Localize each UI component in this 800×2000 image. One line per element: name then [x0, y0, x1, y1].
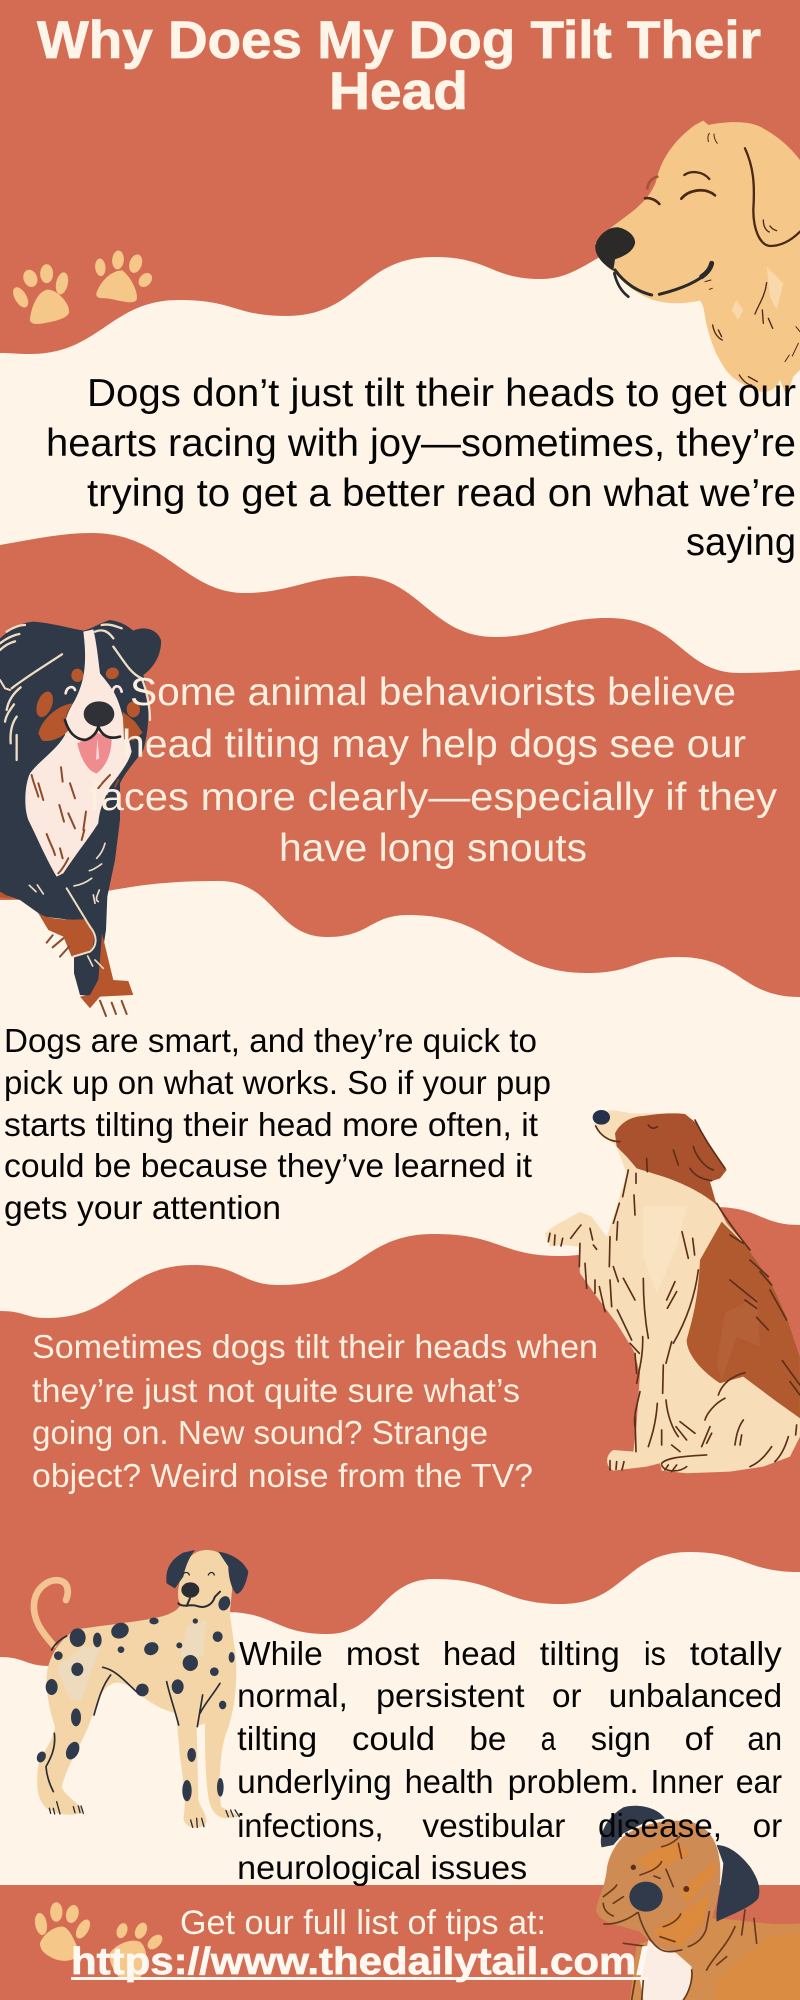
text block: health warning: of [685, 1720, 714, 1757]
cream wave band: middle [0, 881, 800, 1318]
text block: intro paragraph: saying [686, 521, 796, 564]
text block: dogs are smart: Dogs are smart, and they’re quick to [4, 1022, 537, 1059]
text block: not quite sure: going on. New sound? Strange [32, 1414, 488, 1451]
dog: cream fur strokes [0, 625, 150, 968]
cream wave band: lower [0, 1552, 800, 1885]
text block: health warning [237, 1635, 782, 1886]
text block: dogs are smart [4, 1022, 551, 1226]
dog: tan markings [0, 666, 143, 1008]
text block: health warning: Inner [650, 1763, 724, 1800]
text block: intro paragraph [46, 372, 796, 564]
dog: eyes [631, 1865, 636, 1870]
text block: not quite sure: object? Weird noise from the TV? [32, 1457, 533, 1494]
text block: health warning: is [644, 1635, 666, 1672]
dog: fur strokes [548, 1120, 800, 1472]
text block: health warning: head [443, 1635, 516, 1672]
dog: face [181, 1582, 199, 1598]
text block: animal behaviorists: head tilting may help dogs see our [122, 723, 746, 766]
footer: website link: https://www.thedailytail.com/ [71, 1941, 648, 1983]
text block: health warning: a [541, 1720, 556, 1757]
text block: intro paragraph: trying to get a better read on what we’re [87, 472, 796, 515]
text block: health warning: tilting [540, 1635, 620, 1672]
dog: lower leg tan [80, 933, 133, 1008]
text block: health warning: or [552, 1677, 582, 1714]
text block: dogs are smart: gets your attention [4, 1189, 281, 1226]
dog: brown fur strokes [32, 767, 127, 1016]
icon: footer paw prints [34, 1902, 165, 1977]
illustration: brown boxer dog [596, 1806, 800, 2000]
dog: nose [593, 1110, 610, 1125]
footer call to action [71, 1904, 648, 1983]
dog: ears [166, 1550, 248, 1594]
text block: health warning: normal, [237, 1677, 348, 1714]
text block: health warning: totally [690, 1635, 782, 1672]
text block: health warning: neurological issues [237, 1849, 527, 1886]
dog: head [596, 1821, 720, 1951]
text block: health warning: could [352, 1720, 435, 1757]
dog: smiling eyes [66, 687, 75, 693]
dog: spots [35, 1594, 235, 1801]
text block: dogs are smart: could be because they’ve learned it [4, 1147, 532, 1184]
text block: health warning: problem. [508, 1763, 639, 1800]
dog: brown back patch [687, 1222, 800, 1418]
text block: dogs are smart: pick up on what works. So if your pup [4, 1064, 551, 1101]
text block: health warning: be [469, 1720, 506, 1757]
text block: not quite sure: they’re just not quite sure what’s [32, 1372, 520, 1409]
text block: health warning: health [405, 1763, 494, 1800]
icon: top paw prints [10, 250, 155, 322]
illustration: golden retriever head [595, 121, 800, 397]
text block: health warning: underlying [237, 1763, 392, 1800]
text block: dogs are smart: starts tilting their head more often, it [4, 1106, 538, 1143]
footer: tips line: Get our full list of tips at: [180, 1904, 546, 1942]
dog: wrinkles and mouth [603, 1837, 757, 2000]
illustration: collie sitting with raised paw [545, 1110, 800, 1473]
dog: orange head patches [637, 1840, 717, 1947]
text block: health warning: unbalanced [609, 1677, 782, 1714]
text block: health warning: While [239, 1635, 323, 1672]
text block: animal behaviorists: faces more clearly—especially if they [89, 776, 778, 819]
text block: intro paragraph: Dogs don’t just tilt their heads to get our [87, 372, 796, 415]
text block: health warning: disease, [598, 1807, 722, 1844]
text block: health warning: tilting [237, 1720, 317, 1757]
dog: white blaze and chest [25, 629, 132, 877]
text block: animal behaviorists [89, 671, 778, 870]
illustration: dalmatian standing [34, 1550, 248, 1828]
dog: dark coat [0, 620, 161, 996]
text block: animal behaviorists: have long snouts [279, 827, 587, 870]
title: Why Does My Dog Tilt Their [37, 11, 761, 70]
illustration: bernese mountain dog [0, 620, 161, 1016]
dog: tongue [77, 733, 112, 773]
text block: health warning: vestibular [422, 1807, 565, 1844]
cream wave band: top [0, 200, 800, 673]
text block: health warning: ear [736, 1763, 782, 1800]
dog: right ear [716, 1845, 759, 1922]
dog: cream body [545, 1111, 800, 1473]
dog: body [37, 1550, 240, 1828]
text block: not quite sure [32, 1328, 598, 1494]
text block: health warning: most [346, 1635, 419, 1672]
text block: health warning: or [753, 1807, 782, 1844]
dog: raised paw tan [38, 913, 94, 957]
dog: nose [629, 1882, 663, 1912]
text block: health warning: persistent [376, 1677, 524, 1714]
text block: not quite sure: Sometimes dogs tilt their heads when [32, 1328, 598, 1365]
title: Head [329, 62, 468, 121]
text block: health warning: sign [591, 1720, 651, 1757]
dog: brown head [615, 1113, 727, 1205]
title [37, 11, 761, 121]
text block: animal behaviorists: Some animal behaviorists believe [130, 671, 736, 714]
dog: white chest [640, 1940, 692, 2000]
dog: tail [34, 1580, 68, 1645]
dog: left ear [601, 1806, 665, 1847]
dog: nose and mouth [84, 701, 114, 727]
text block: health warning: infections, [237, 1807, 384, 1844]
dog: body [630, 1918, 800, 2000]
text block: intro paragraph: hearts racing with joy—sometimes, they’re [46, 422, 796, 465]
text block: health warning: an [747, 1720, 782, 1757]
